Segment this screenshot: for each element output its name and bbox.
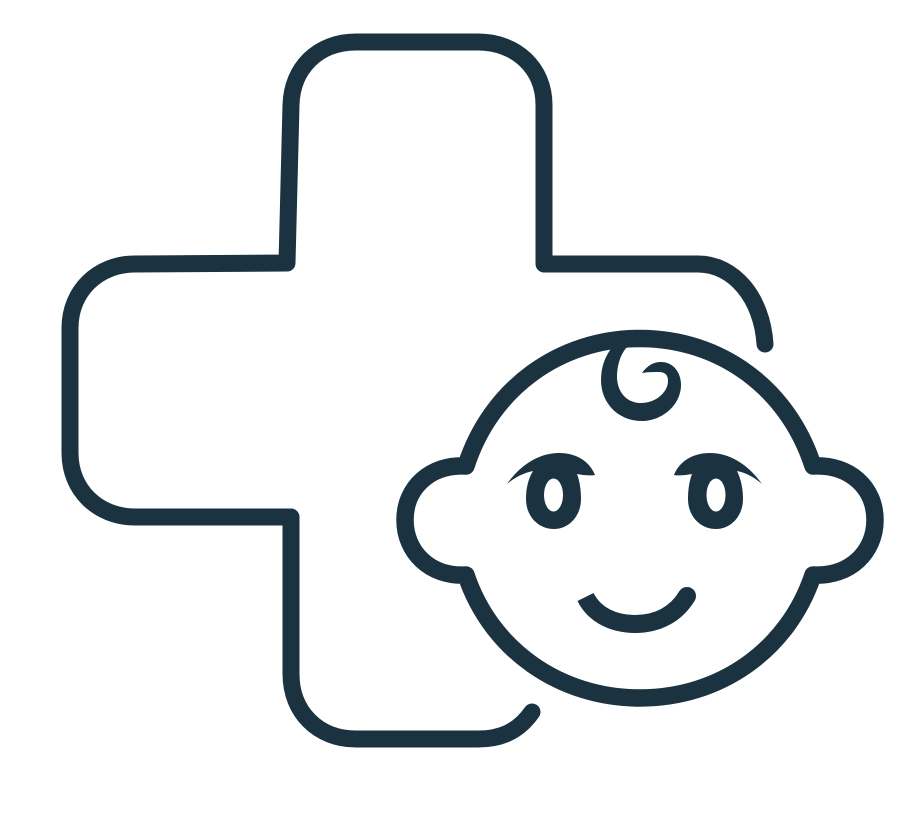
- icon: hair curl: [601, 346, 681, 421]
- icon: smile: [586, 587, 696, 624]
- icon: right eye and brow: [674, 453, 762, 529]
- icon: medical cross outline: [70, 42, 765, 739]
- icon: left eye and brow: [507, 453, 595, 529]
- icon: baby head outline: [405, 338, 875, 698]
